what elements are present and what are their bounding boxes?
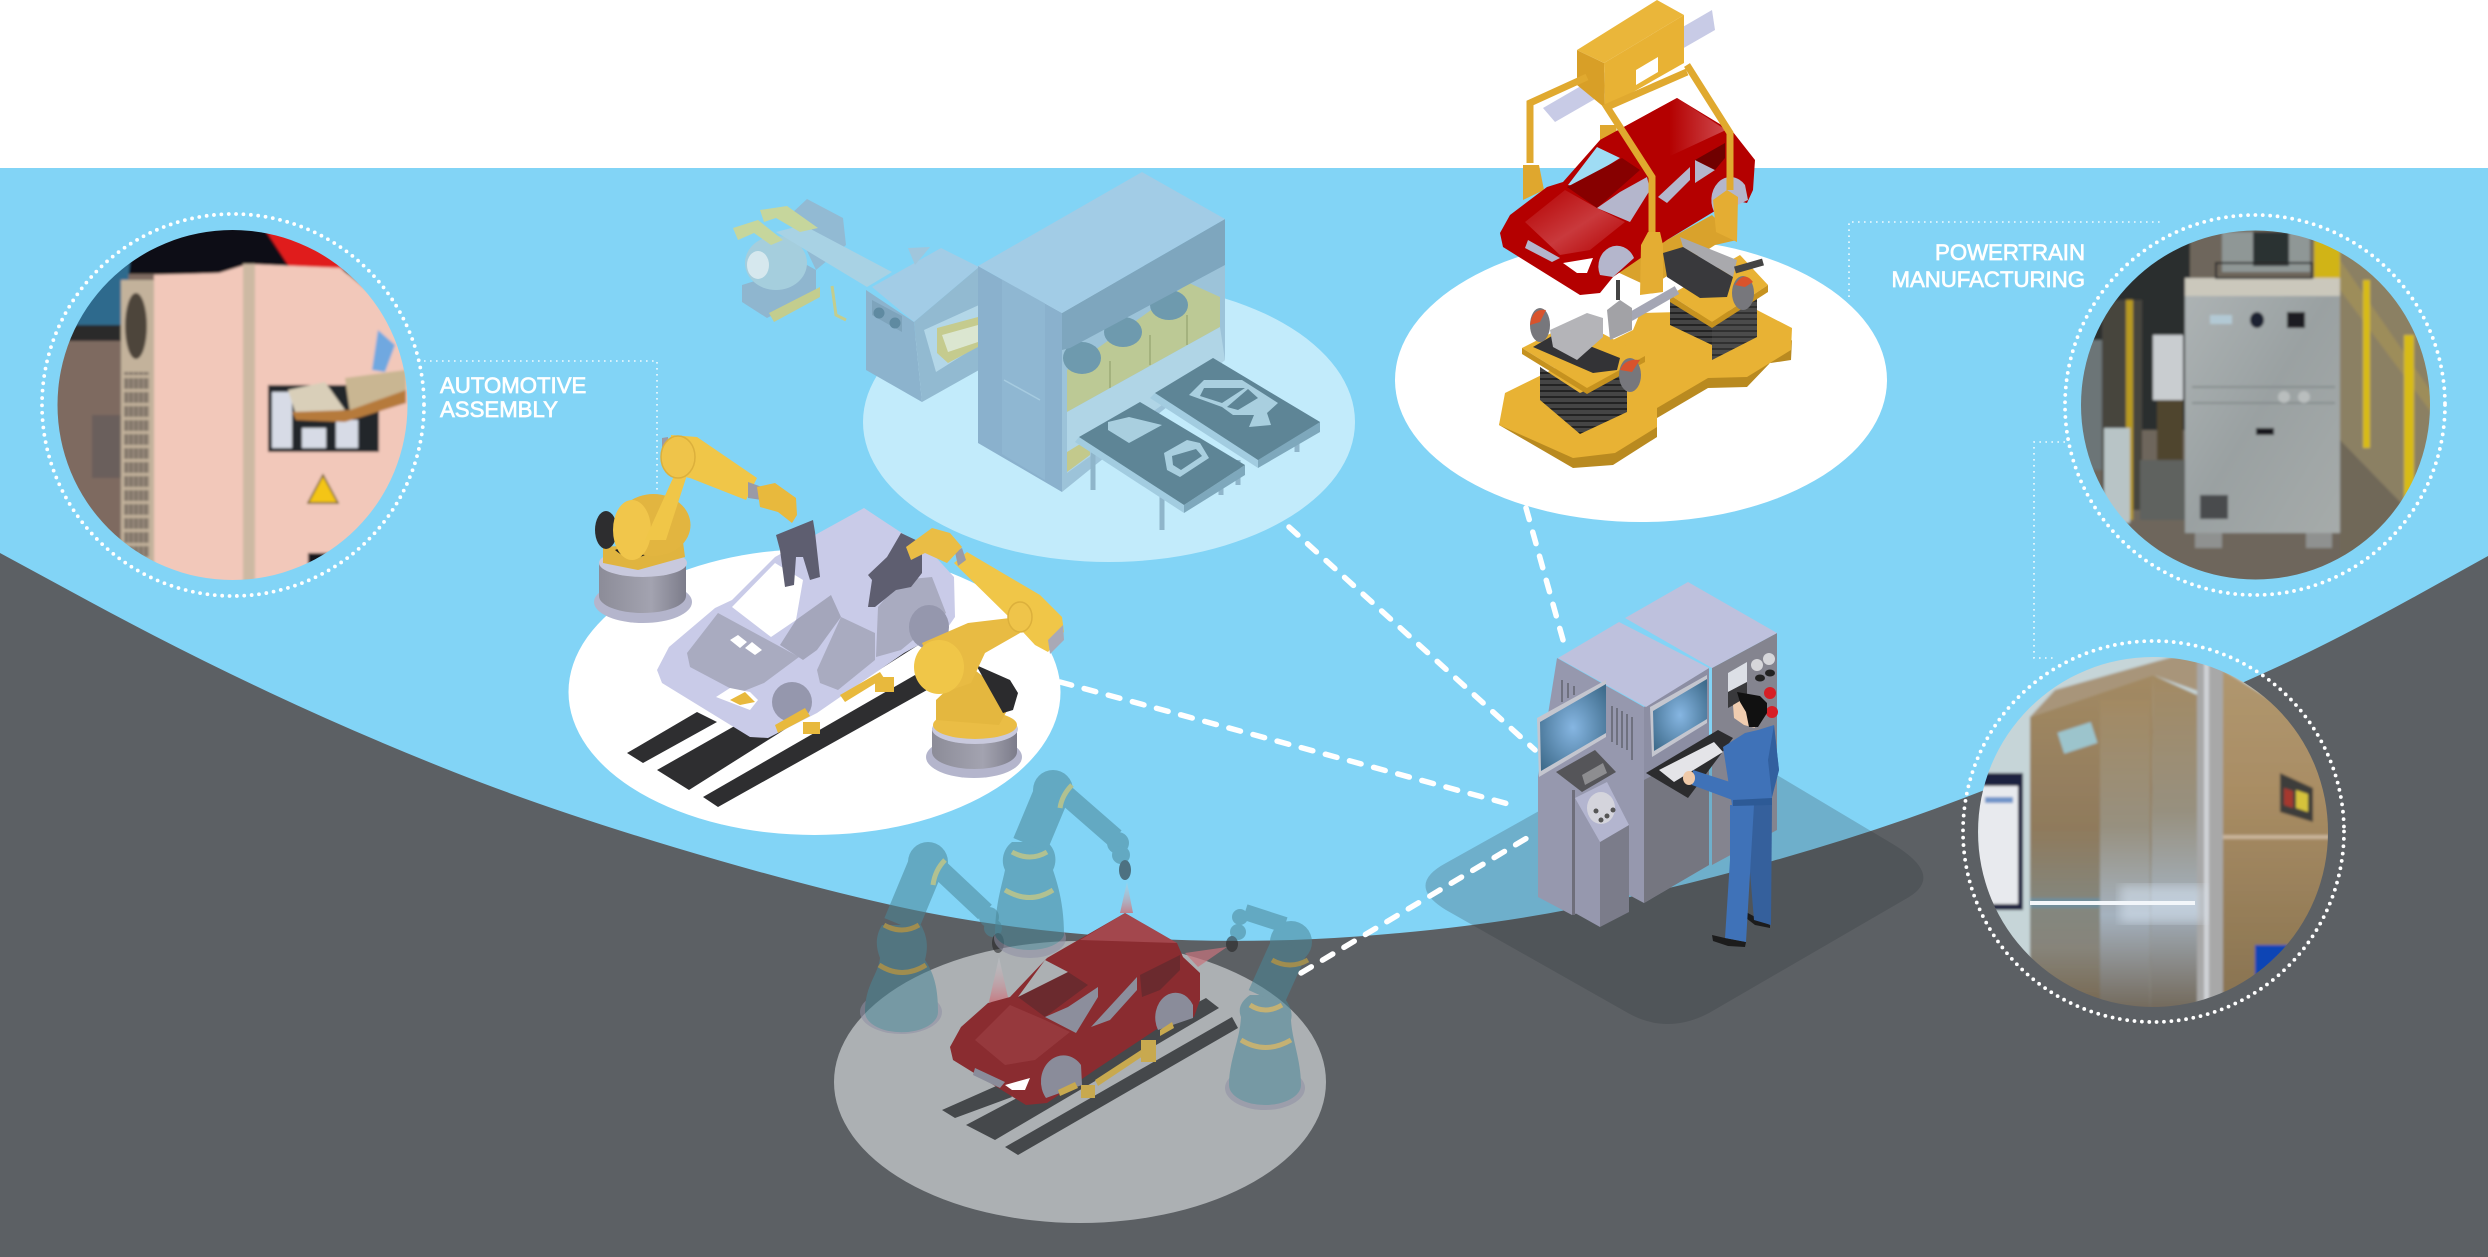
- left robot arm: [595, 435, 797, 570]
- label: automotive assembly: ASSEMBLY: [440, 397, 558, 422]
- photo content: [50, 222, 416, 588]
- red car body: [1500, 98, 1755, 295]
- photo circle: pink control cabinet: [42, 214, 424, 596]
- conveyor tracks: [627, 622, 939, 807]
- coil feeder: [733, 199, 892, 322]
- right paint robot: [1225, 909, 1312, 1110]
- left robot pedestal: [594, 549, 692, 623]
- machine cabinets: [1538, 582, 1777, 915]
- dashed connectors: [1060, 508, 1565, 973]
- operator control station illustration: [1537, 582, 1779, 947]
- front hanger tubes and posts: [1607, 65, 1738, 295]
- steel highlight: [2120, 885, 2205, 923]
- straightener unit: [866, 247, 979, 402]
- right control panel: [1728, 653, 1778, 718]
- left gripper: [776, 520, 820, 587]
- dotted ring: [1963, 641, 2344, 1022]
- carrier brackets: [730, 672, 894, 734]
- platform: paint station: [834, 941, 1326, 1223]
- conveyor tracks: [942, 998, 1238, 1155]
- dotted ring: [42, 214, 424, 596]
- rear stacks and slab: [1670, 255, 1768, 360]
- platform: press station: [863, 282, 1355, 562]
- front stacks and slab: [1522, 320, 1645, 434]
- drive shaft and gearbox: [1607, 280, 1677, 340]
- photo content: [2075, 225, 2437, 587]
- right robot arm: [906, 528, 1064, 739]
- press line illustration: [733, 172, 1320, 530]
- control pedestal: [1556, 750, 1629, 927]
- right monitor: [1650, 675, 1707, 757]
- monorail beam: [1543, 10, 1715, 122]
- rear hanger posts: [1523, 77, 1620, 200]
- rear yoke behind car: [1613, 215, 1737, 293]
- platform: body assembly: [568, 549, 1060, 835]
- body assembly illustration: [594, 435, 1064, 807]
- left monitor: [1537, 680, 1606, 777]
- left conveyor with door parts: [1075, 402, 1245, 513]
- label: automotive assembly: AUTOMOTIVE: [440, 373, 586, 398]
- red painted car: [950, 913, 1200, 1105]
- photo circle: stainless steel enclosure: [1963, 641, 2344, 1022]
- label: powertrain manufacturing: POWERTRAIN: [1935, 240, 2085, 265]
- right conveyor with body side part: [1150, 358, 1320, 468]
- photo circle: galvanized chiller unit: [2065, 215, 2445, 595]
- conveyor legs: [1093, 442, 1297, 530]
- right robot pedestal: [926, 714, 1022, 778]
- photo content: [1970, 650, 2336, 1016]
- keyboard tray: [1646, 730, 1733, 798]
- press frame: [978, 172, 1225, 492]
- rear axle assembly: [1663, 237, 1763, 310]
- paint station illustration: [860, 770, 1312, 1155]
- front axle assembly: [1530, 308, 1641, 392]
- dotted ring: [2065, 215, 2445, 595]
- platform: powertrain marriage: [1395, 238, 1887, 522]
- dark gray floor curve: [0, 553, 2488, 1257]
- carrier brackets: [1058, 1022, 1174, 1098]
- spray cones: [989, 882, 1227, 1002]
- callout connector lines: [424, 222, 2161, 658]
- yellow platform: [1499, 310, 1792, 468]
- car body in white: [657, 508, 955, 738]
- operator figure: [1683, 692, 1779, 947]
- label: powertrain manufacturing: MANUFACTURING: [1891, 267, 2085, 292]
- control station floor shadow: [1426, 725, 1923, 1024]
- left paint robot: [860, 842, 1004, 1034]
- powertrain station illustration: [1499, 0, 1792, 468]
- center paint robot: [994, 770, 1131, 958]
- carrier box: [1577, 0, 1684, 108]
- right gripper: [868, 533, 922, 607]
